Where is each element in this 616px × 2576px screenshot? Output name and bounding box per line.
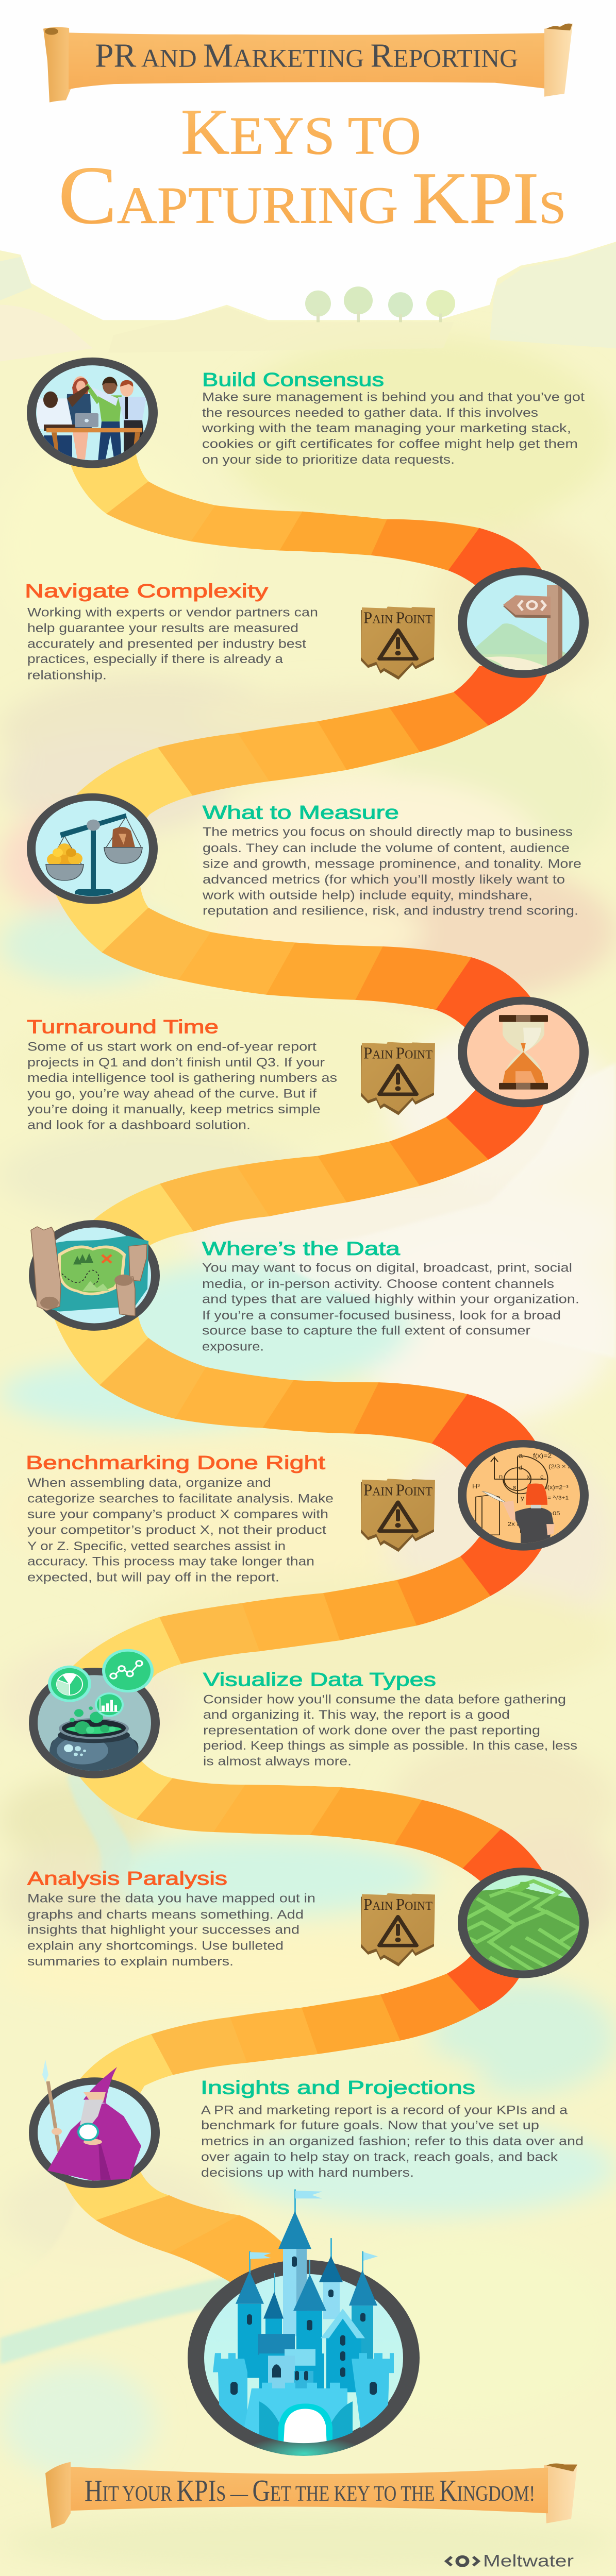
icon: researcher at equation board: s	[513, 1484, 516, 1490]
bar chart bubble	[95, 1692, 124, 1717]
body text: Y or Z. Specific, vetted searches assist in	[27, 1539, 286, 1553]
pie chart bubble	[48, 1666, 91, 1702]
body text: advanced metrics (for which you’ll mostly likely want to	[203, 872, 565, 886]
main title: KEYS TO	[181, 96, 421, 168]
body text: is almost always more.	[203, 1754, 352, 1768]
body text: Make sure management is behind you and that you’ve got	[202, 389, 585, 404]
body text: accurately and presented per industry best	[27, 637, 307, 651]
body text: accuracy. This process may take longer than	[27, 1554, 314, 1568]
bottom scroll banner	[45, 2462, 577, 2529]
icon: researcher at equation board: f(x)=2⁻³	[545, 1484, 569, 1490]
body text: Make sure the data you have mapped out in	[27, 1891, 315, 1905]
body text: explain any shortcomings. Use bulleted	[27, 1939, 284, 1953]
icon: researcher at equation board: f(x)=2	[533, 1452, 552, 1459]
heading: Build Consensus	[202, 369, 384, 391]
step 9: Insights and Projections	[29, 2060, 584, 2188]
top scroll banner	[43, 24, 573, 103]
icon: researcher at equation board: 2x a	[508, 1520, 521, 1527]
body text: metrics in an organized fashion; refer to this data over and	[201, 2134, 584, 2148]
body text: relationship.	[27, 668, 107, 682]
body text: Consider how you'll consume the data before gathering	[203, 1692, 566, 1706]
body text: reputation and resilience, risk, and industry trend scoring.	[203, 904, 578, 918]
icon: researcher at equation board: a	[519, 1452, 523, 1459]
body text: decisions up with hard numbers.	[201, 2165, 414, 2179]
body text: When assembling data, organize and	[27, 1476, 271, 1490]
main title	[58, 96, 566, 241]
castle destination	[188, 2189, 420, 2471]
body text: cookies or gift certificates for coffee might help get them	[202, 437, 578, 451]
pain point sign: PAIN POINT	[363, 609, 432, 627]
heading: Visualize Data Types	[203, 1669, 436, 1690]
body text: The metrics you focus on should directly map to business	[203, 825, 573, 839]
body text	[27, 605, 318, 682]
icon: researcher at equation board: H	[520, 1528, 524, 1534]
body text: and look for a dashboard solution.	[27, 1118, 251, 1132]
icon: cauldron with data bubbles	[29, 1649, 160, 1778]
body text: period. Keep things as simple as possible. In this case, less	[203, 1738, 577, 1752]
banner heading: PR AND MARKETING REPORTING	[95, 37, 518, 74]
icon: researcher at equation board: d	[519, 1464, 522, 1471]
body text: and types that are valued highly within your organization.	[202, 1292, 579, 1306]
winding road	[51, 453, 550, 2286]
step 4: Turnaround Time	[27, 997, 589, 1132]
Meltwater logo	[446, 2552, 574, 2570]
body text: benchmark for future goals. Now that you’ve set up	[201, 2118, 539, 2132]
castle illustration	[213, 2189, 394, 2445]
body text	[27, 1891, 315, 1969]
icon: wizard	[29, 2060, 160, 2188]
pain point sign: PAIN POINT	[363, 1896, 432, 1913]
Meltwater logo: Meltwater	[483, 2552, 574, 2570]
body text: goals. They can include the volume of content, audience	[203, 841, 570, 855]
body text	[27, 1476, 334, 1584]
icon: researcher at equation board: y	[521, 1495, 525, 1501]
body text: practices, especially if there is already a	[27, 652, 283, 666]
icon: treasure map	[29, 1220, 160, 1331]
body text: working with the team managing your marketing stack,	[202, 421, 571, 435]
sky	[0, 0, 616, 320]
body text: you go, you’re way ahead of the curve. But if	[27, 1087, 317, 1100]
body text: on your side to prioritize data requests.	[202, 452, 455, 467]
step 2: Navigate Complexity	[25, 567, 589, 682]
pain point sign	[361, 606, 435, 680]
heading: Benchmarking Done Right	[26, 1452, 326, 1473]
body text: and organizing it. This way, the report is a good	[203, 1707, 510, 1721]
body text: sure your company’s product X compares with	[27, 1507, 328, 1521]
body text: summaries to explain numbers.	[27, 1954, 234, 1969]
body text: If you’re a consumer-focused business, look for a broad	[202, 1308, 561, 1322]
banner call to action: HIT YOUR KPIS — GET THE KEY TO THE KINGDOM!	[85, 2474, 535, 2507]
icon: researcher at equation board	[458, 1440, 589, 1551]
icon: green maze	[458, 1868, 589, 1978]
step 3: What to Measure	[27, 793, 581, 918]
body text	[202, 825, 581, 918]
body text	[202, 1261, 579, 1353]
body text	[27, 1039, 337, 1132]
body text: expected, but will pay off in the report.	[27, 1570, 279, 1584]
body text: representation of work done over the past reporting	[203, 1723, 540, 1737]
icon: researcher at equation board: = ²√3+1	[547, 1496, 569, 1501]
body text: you’re doing it manually, keep metrics simple	[27, 1102, 321, 1116]
icon: researcher at equation board: x	[527, 1473, 530, 1480]
heading: What to Measure	[203, 802, 399, 823]
icon: hourglass	[458, 997, 589, 1107]
body text: Some of us start work on end-of-year report	[27, 1039, 317, 1054]
icon: researcher at equation board: (2/3 × 2	[548, 1463, 572, 1470]
icon: signpost	[458, 567, 589, 679]
step 1: Build Consensus	[27, 358, 585, 468]
main title: CAPTURING KPIS	[58, 149, 566, 241]
icon: balance scale	[27, 793, 158, 904]
body text	[203, 1692, 577, 1768]
body text: work with outside help) include equity, mindshare,	[202, 888, 532, 902]
castle ring	[188, 2260, 420, 2456]
body text	[202, 389, 585, 467]
icon: researcher at equation board: c	[540, 1473, 543, 1480]
body text: Working with experts or vendor partners can	[27, 605, 318, 619]
background hills and trees	[0, 243, 616, 361]
body text: the resources needed to gather data. If this involves	[202, 405, 538, 419]
body text: over again to help stay on track, reach goals, and back	[201, 2150, 558, 2164]
body text: projects in Q1 and don’t finish until Q3. If your	[27, 1055, 325, 1069]
pain point sign	[361, 1479, 435, 1552]
heading: Turnaround Time	[27, 1016, 219, 1038]
icon: researcher at equation board: H³	[472, 1483, 480, 1490]
icon: team high five	[27, 358, 158, 468]
pain point sign: PAIN POINT	[363, 1044, 432, 1062]
pain point sign	[361, 1042, 435, 1115]
step 7: Visualize Data Types	[29, 1649, 577, 1778]
body text: media intelligence tool is gathering numbers as	[27, 1071, 337, 1085]
background mountain, river and paths	[0, 1062, 616, 2364]
line chart bubble	[102, 1649, 154, 1692]
icon: researcher at equation board: 05	[553, 1510, 560, 1517]
body text: categorize searches to facilitate analysis. Make	[27, 1492, 334, 1505]
body text: your competitor’s product X, not their product	[27, 1523, 327, 1537]
pain point sign: PAIN POINT	[363, 1481, 432, 1499]
step 5: Where's the Data	[29, 1220, 579, 1353]
body text: graphs and charts means something. Add	[27, 1907, 304, 1921]
body text	[201, 2103, 584, 2179]
body text: insights that highlight your successes and	[27, 1922, 299, 1937]
body text: exposure.	[202, 1340, 264, 1353]
heading: Analysis Paralysis	[27, 1868, 227, 1889]
heading: Navigate Complexity	[25, 580, 269, 602]
body text: A PR and marketing report is a record of your KPIs and a	[201, 2103, 568, 2117]
body text: help guarantee your results are measured	[27, 621, 298, 635]
body text: You may want to focus on digital, broadcast, print, social	[202, 1261, 572, 1275]
heading: Where’s the Data	[202, 1238, 400, 1259]
body text: media, or in-person activity. Choose content channels	[202, 1277, 554, 1291]
step 8: Analysis Paralysis	[27, 1868, 589, 1978]
body text: source base to capture the full extent of consumer	[202, 1324, 530, 1337]
icon: researcher at equation board: n	[499, 1473, 503, 1480]
pain point sign	[361, 1893, 435, 1967]
step 6: Benchmarking Done Right	[26, 1440, 589, 1584]
heading: Insights and Projections	[201, 2077, 475, 2098]
body text: size and growth, message prominence, and tonality. More	[203, 857, 581, 871]
